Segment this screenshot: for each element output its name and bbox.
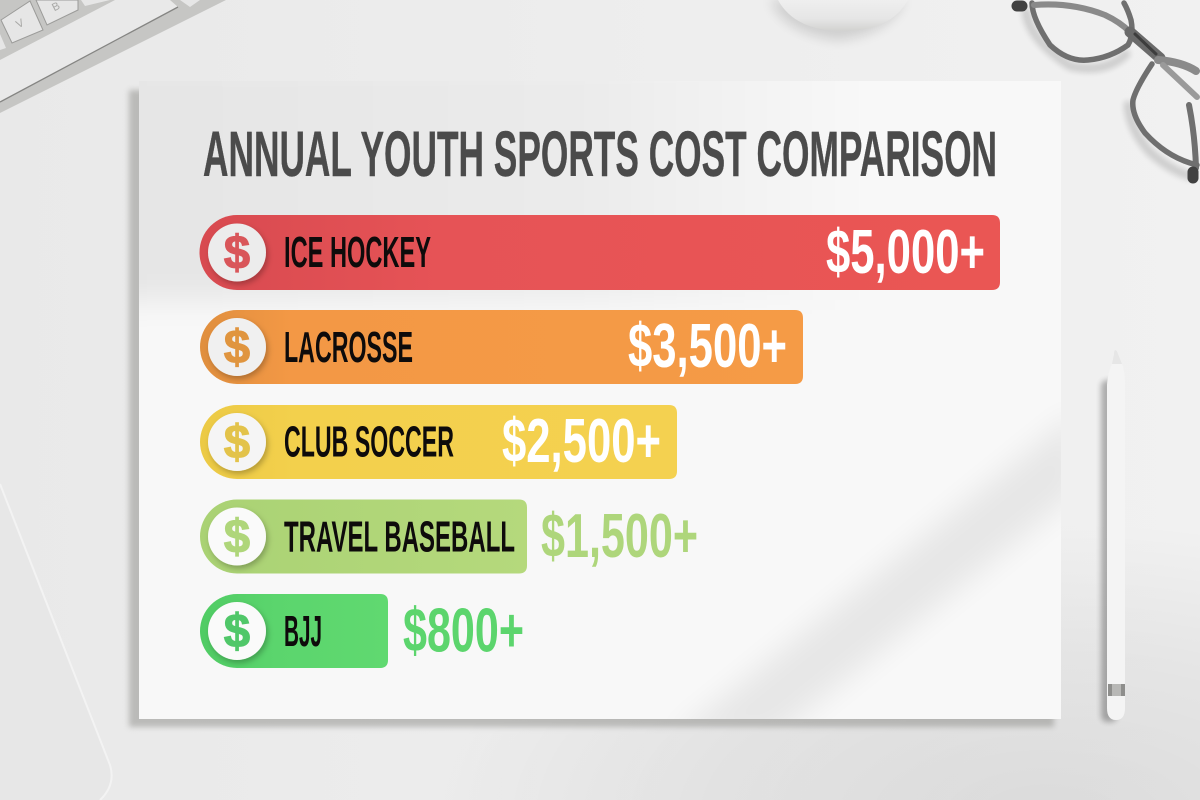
bar: ice hockey [200, 215, 1000, 290]
value: $2,500+ [502, 407, 661, 476]
icon: dollar coin: $ [224, 226, 250, 278]
label: LACROSSE [284, 324, 413, 372]
icon: dollar coin [208, 413, 266, 471]
icon: dollar coin: $ [224, 320, 250, 373]
value: bjj: $800+ [403, 596, 524, 666]
paper shadows [100, 60, 1080, 740]
mug [770, 0, 908, 40]
value: travel baseball: $1,500+ [541, 502, 698, 571]
label: CLUB SOCCER [284, 418, 454, 466]
icon: dollar coin: $ [224, 415, 250, 468]
value: $3,500+ [628, 312, 787, 381]
desk shadow [400, 500, 1200, 800]
bar: bjj [200, 594, 388, 668]
keyboard [0, 0, 226, 113]
glasses [1017, 3, 1197, 178]
icon: dollar coin: $ [224, 604, 250, 657]
tablet corner [0, 484, 112, 800]
label: TRAVEL BASEBALL [284, 514, 515, 562]
value: $5,000+ [826, 218, 985, 287]
paper sheet shadow [129, 90, 1054, 727]
label: ICE HOCKEY [284, 229, 431, 277]
key letter V: V [14, 17, 27, 31]
key letter B: B [50, 0, 62, 14]
bar: travel baseball [200, 500, 527, 574]
icon: dollar coin: $ [224, 510, 250, 562]
bar: bjj: BJJ [284, 608, 322, 656]
icon: dollar coin [208, 224, 266, 282]
icon: dollar coin [208, 318, 266, 376]
bar: club soccer [200, 405, 677, 479]
pencil [1101, 350, 1125, 722]
icon: dollar coin [208, 508, 266, 566]
icon: dollar coin [208, 602, 266, 660]
bar: lacrosse [200, 310, 803, 384]
paper sheet [139, 81, 1061, 719]
